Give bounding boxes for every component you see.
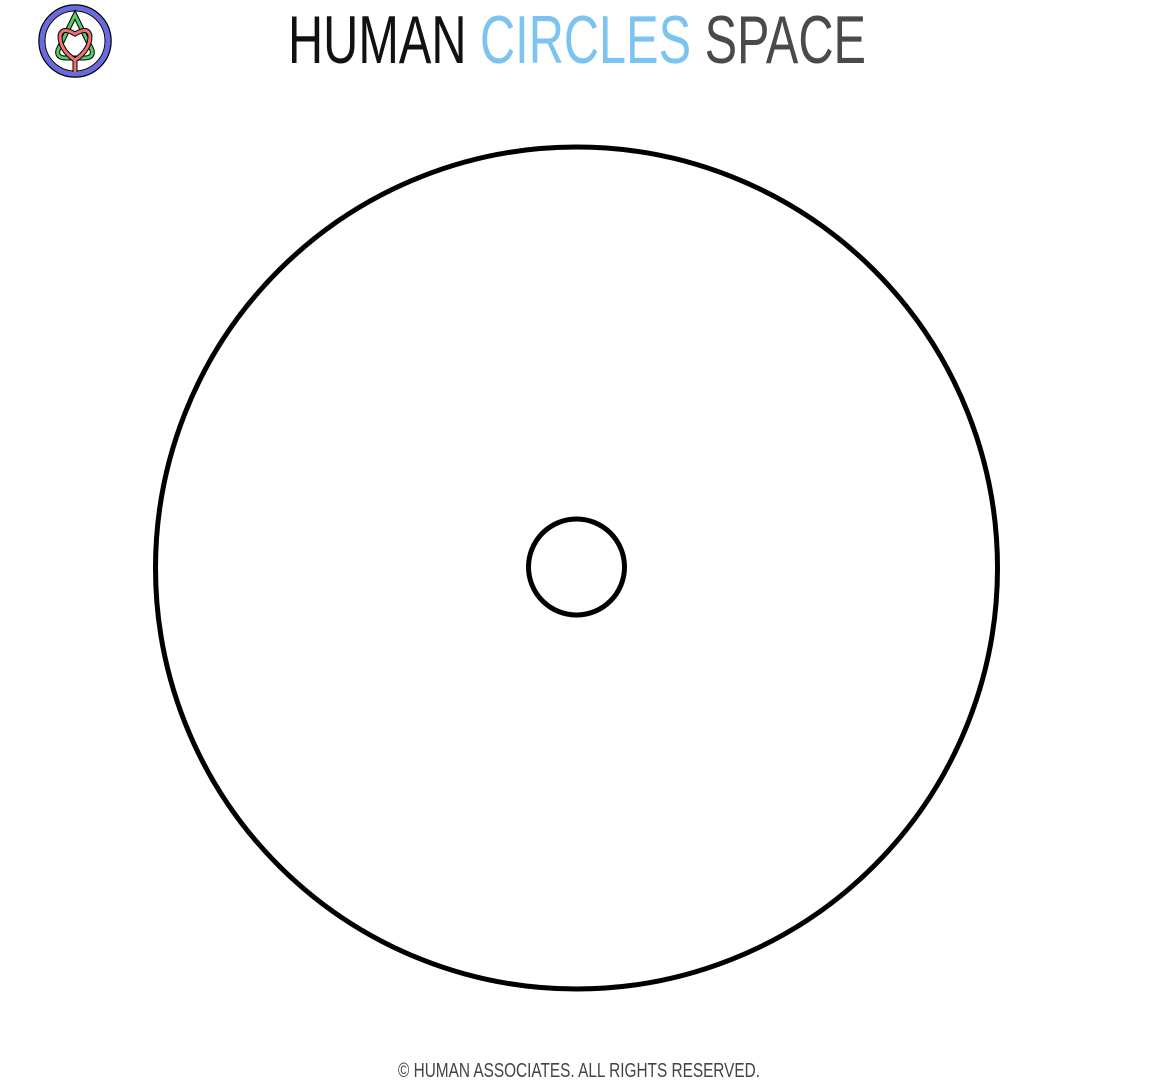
title: HUMAN CIRCLES SPACE — [288, 2, 866, 78]
icon: celtic knot logo — [39, 5, 111, 77]
outer circle — [156, 147, 998, 989]
inner circle — [528, 519, 624, 615]
